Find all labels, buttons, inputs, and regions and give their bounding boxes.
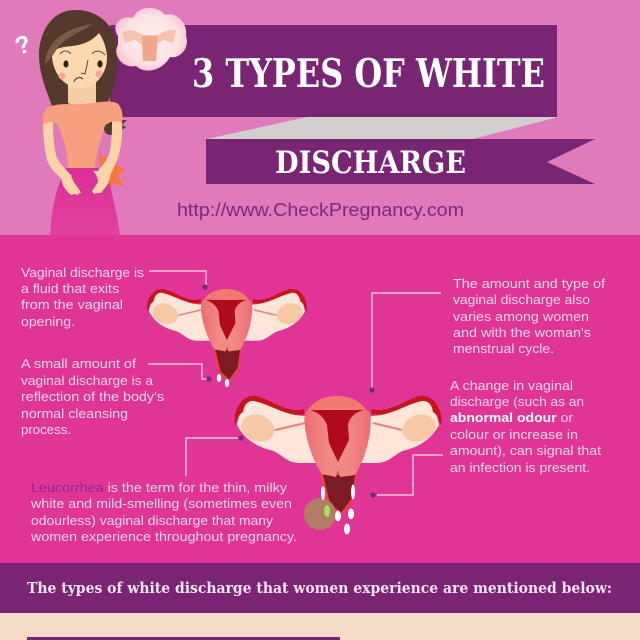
eyes <box>63 60 69 68</box>
text: leucorrhea: odourless) vaginal discharge that many <box>31 513 274 528</box>
website url: http://www.CheckPregnancy.com <box>177 200 464 220</box>
text: what discharge is: from the vaginal <box>21 297 123 312</box>
thought bubble <box>115 8 187 71</box>
nose <box>81 60 88 74</box>
header background <box>0 0 640 235</box>
title banner <box>110 25 557 117</box>
text: leucorrhea <box>30 480 297 544</box>
right arm <box>98 120 122 180</box>
connector: amount and type <box>369 293 441 393</box>
icon: small uterus in bubble <box>122 30 176 61</box>
text: small amount <box>21 356 165 437</box>
subtitle ribbon: DISCHARGE <box>275 145 466 181</box>
text: amount and type: The amount and type of <box>453 276 605 291</box>
text: what discharge is <box>21 265 145 329</box>
types banner: The types of white discharge that women experience are mentioned below: <box>27 579 612 597</box>
pink intro panel background <box>0 235 640 563</box>
text: change in discharge: discharge (such as an <box>450 394 584 409</box>
text: what discharge is: a fluid that exits <box>21 281 120 296</box>
text: amount and type: and with the woman's <box>453 325 592 340</box>
text: small amount: reflection of the body's <box>21 389 165 404</box>
back hair <box>39 10 118 106</box>
pain burst <box>99 152 126 190</box>
text: amount and type: varies among women <box>453 309 589 324</box>
hair highlight <box>45 24 93 65</box>
ribbon fold <box>207 117 558 139</box>
skirt <box>50 168 120 235</box>
neck <box>68 82 96 110</box>
infection patch on big diagram <box>304 498 336 530</box>
cheeks <box>58 72 66 80</box>
text: leucorrhea: white and mild-smelling (sometimes even <box>30 496 292 511</box>
text: small amount: A small amount of <box>21 356 136 371</box>
text: change in discharge: abnormal odour or <box>450 410 574 425</box>
eyebrows <box>60 51 105 55</box>
left arm <box>43 120 72 180</box>
text: amount and type <box>453 276 605 356</box>
mouth <box>74 78 83 82</box>
right hand <box>92 170 112 194</box>
text: what discharge is: Vaginal discharge is <box>21 265 145 280</box>
text: leucorrhea: women experience throughout pregnancy. <box>30 529 297 544</box>
connector: change <box>370 455 443 498</box>
discharge drops, small diagram <box>217 374 229 387</box>
icon: question mark: ? <box>11 30 35 61</box>
text: amount and type: vaginal discharge also <box>453 292 590 307</box>
text: leucorrhea: Leucorrhea is the term for the thin, milky <box>31 480 288 495</box>
hair tail at arm <box>104 120 127 135</box>
face <box>52 33 107 88</box>
text: what discharge is: opening. <box>21 314 75 329</box>
connector: what discharge is <box>149 271 208 290</box>
left hand <box>61 172 81 195</box>
text: small amount: process. <box>21 422 71 437</box>
discharge drops, big diagram <box>321 484 355 534</box>
blouse <box>43 101 122 168</box>
illustration: worried woman <box>39 10 127 235</box>
text: change in discharge: colour or increase in <box>450 427 578 442</box>
subtitle ribbon <box>206 139 595 184</box>
text: change in discharge <box>450 378 601 475</box>
title banner: 3 TYPES OF WHITE <box>192 51 545 97</box>
text: amount and type: menstrual cycle. <box>453 341 554 356</box>
text: change in discharge: an infection is present. <box>450 460 590 475</box>
beige lower section <box>0 613 640 640</box>
connector: small amount <box>148 364 212 382</box>
text: small amount: vaginal discharge is a <box>21 373 154 388</box>
big uterus diagram <box>235 396 441 517</box>
types banner <box>0 563 640 613</box>
text: small amount: normal cleansing <box>21 406 128 421</box>
text: change in discharge: A change in vaginal <box>450 378 573 393</box>
text: change in discharge: amount), can signal that <box>450 443 601 458</box>
small uterus diagram <box>147 289 307 382</box>
connector: leucorrhea <box>186 435 244 476</box>
